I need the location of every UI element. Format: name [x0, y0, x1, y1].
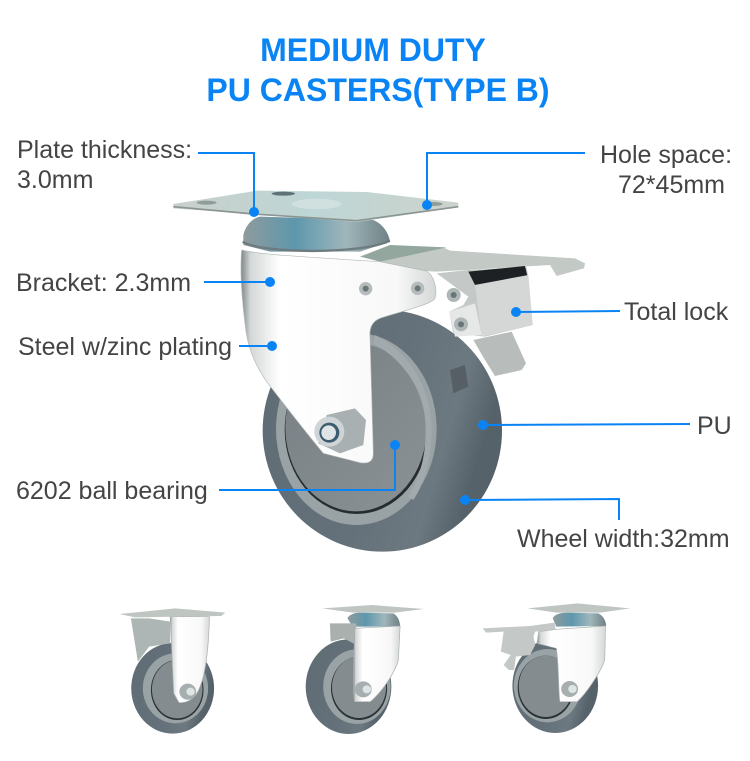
- top plate: [173, 191, 458, 222]
- thumbnail: swivel caster: [306, 605, 424, 734]
- label: plate thickness: Plate thickness:: [17, 136, 192, 164]
- label: hole space: [422, 141, 732, 210]
- label: PU: PU: [697, 412, 732, 440]
- title: PU CASTERS(TYPE B): [206, 72, 550, 108]
- label: ball bearing: 6202 ball bearing: [16, 477, 208, 505]
- wheel hub: [276, 333, 437, 525]
- tread moulding mark: [450, 365, 468, 393]
- axle nut: [314, 408, 366, 453]
- label: ball bearing: [16, 440, 400, 505]
- brake top lever: [380, 247, 585, 276]
- thumbnail: swivel caster with total lock: [483, 603, 630, 733]
- wheel tread: [263, 310, 502, 552]
- label: hole space: 72*45mm: [618, 171, 725, 199]
- thumbnail: rigid caster: [119, 608, 225, 734]
- label: total lock: [511, 298, 729, 326]
- label: PU: [478, 412, 732, 440]
- label: steel plating: Steel w/zinc plating: [18, 333, 232, 361]
- main caster photo: [173, 191, 585, 552]
- label: wheel width: Wheel width:32mm: [517, 525, 730, 553]
- brake housing: [437, 266, 533, 337]
- leader lines and labels: [16, 136, 732, 553]
- brake pedal: [473, 332, 526, 376]
- title: [206, 32, 550, 108]
- label: plate thickness: 3.0mm: [17, 166, 93, 194]
- label: hole space: Hole space:: [600, 141, 732, 169]
- label: plate thickness: [17, 136, 259, 217]
- bracket body: [241, 250, 436, 463]
- label: wheel width: [460, 495, 730, 553]
- label: bracket: [16, 269, 275, 297]
- swivel housing: [243, 217, 390, 252]
- label: total lock: Total lock: [624, 298, 729, 326]
- title: MEDIUM DUTY: [260, 32, 486, 68]
- bracket rivets: [359, 282, 424, 295]
- label: bracket: Bracket: 2.3mm: [16, 269, 191, 297]
